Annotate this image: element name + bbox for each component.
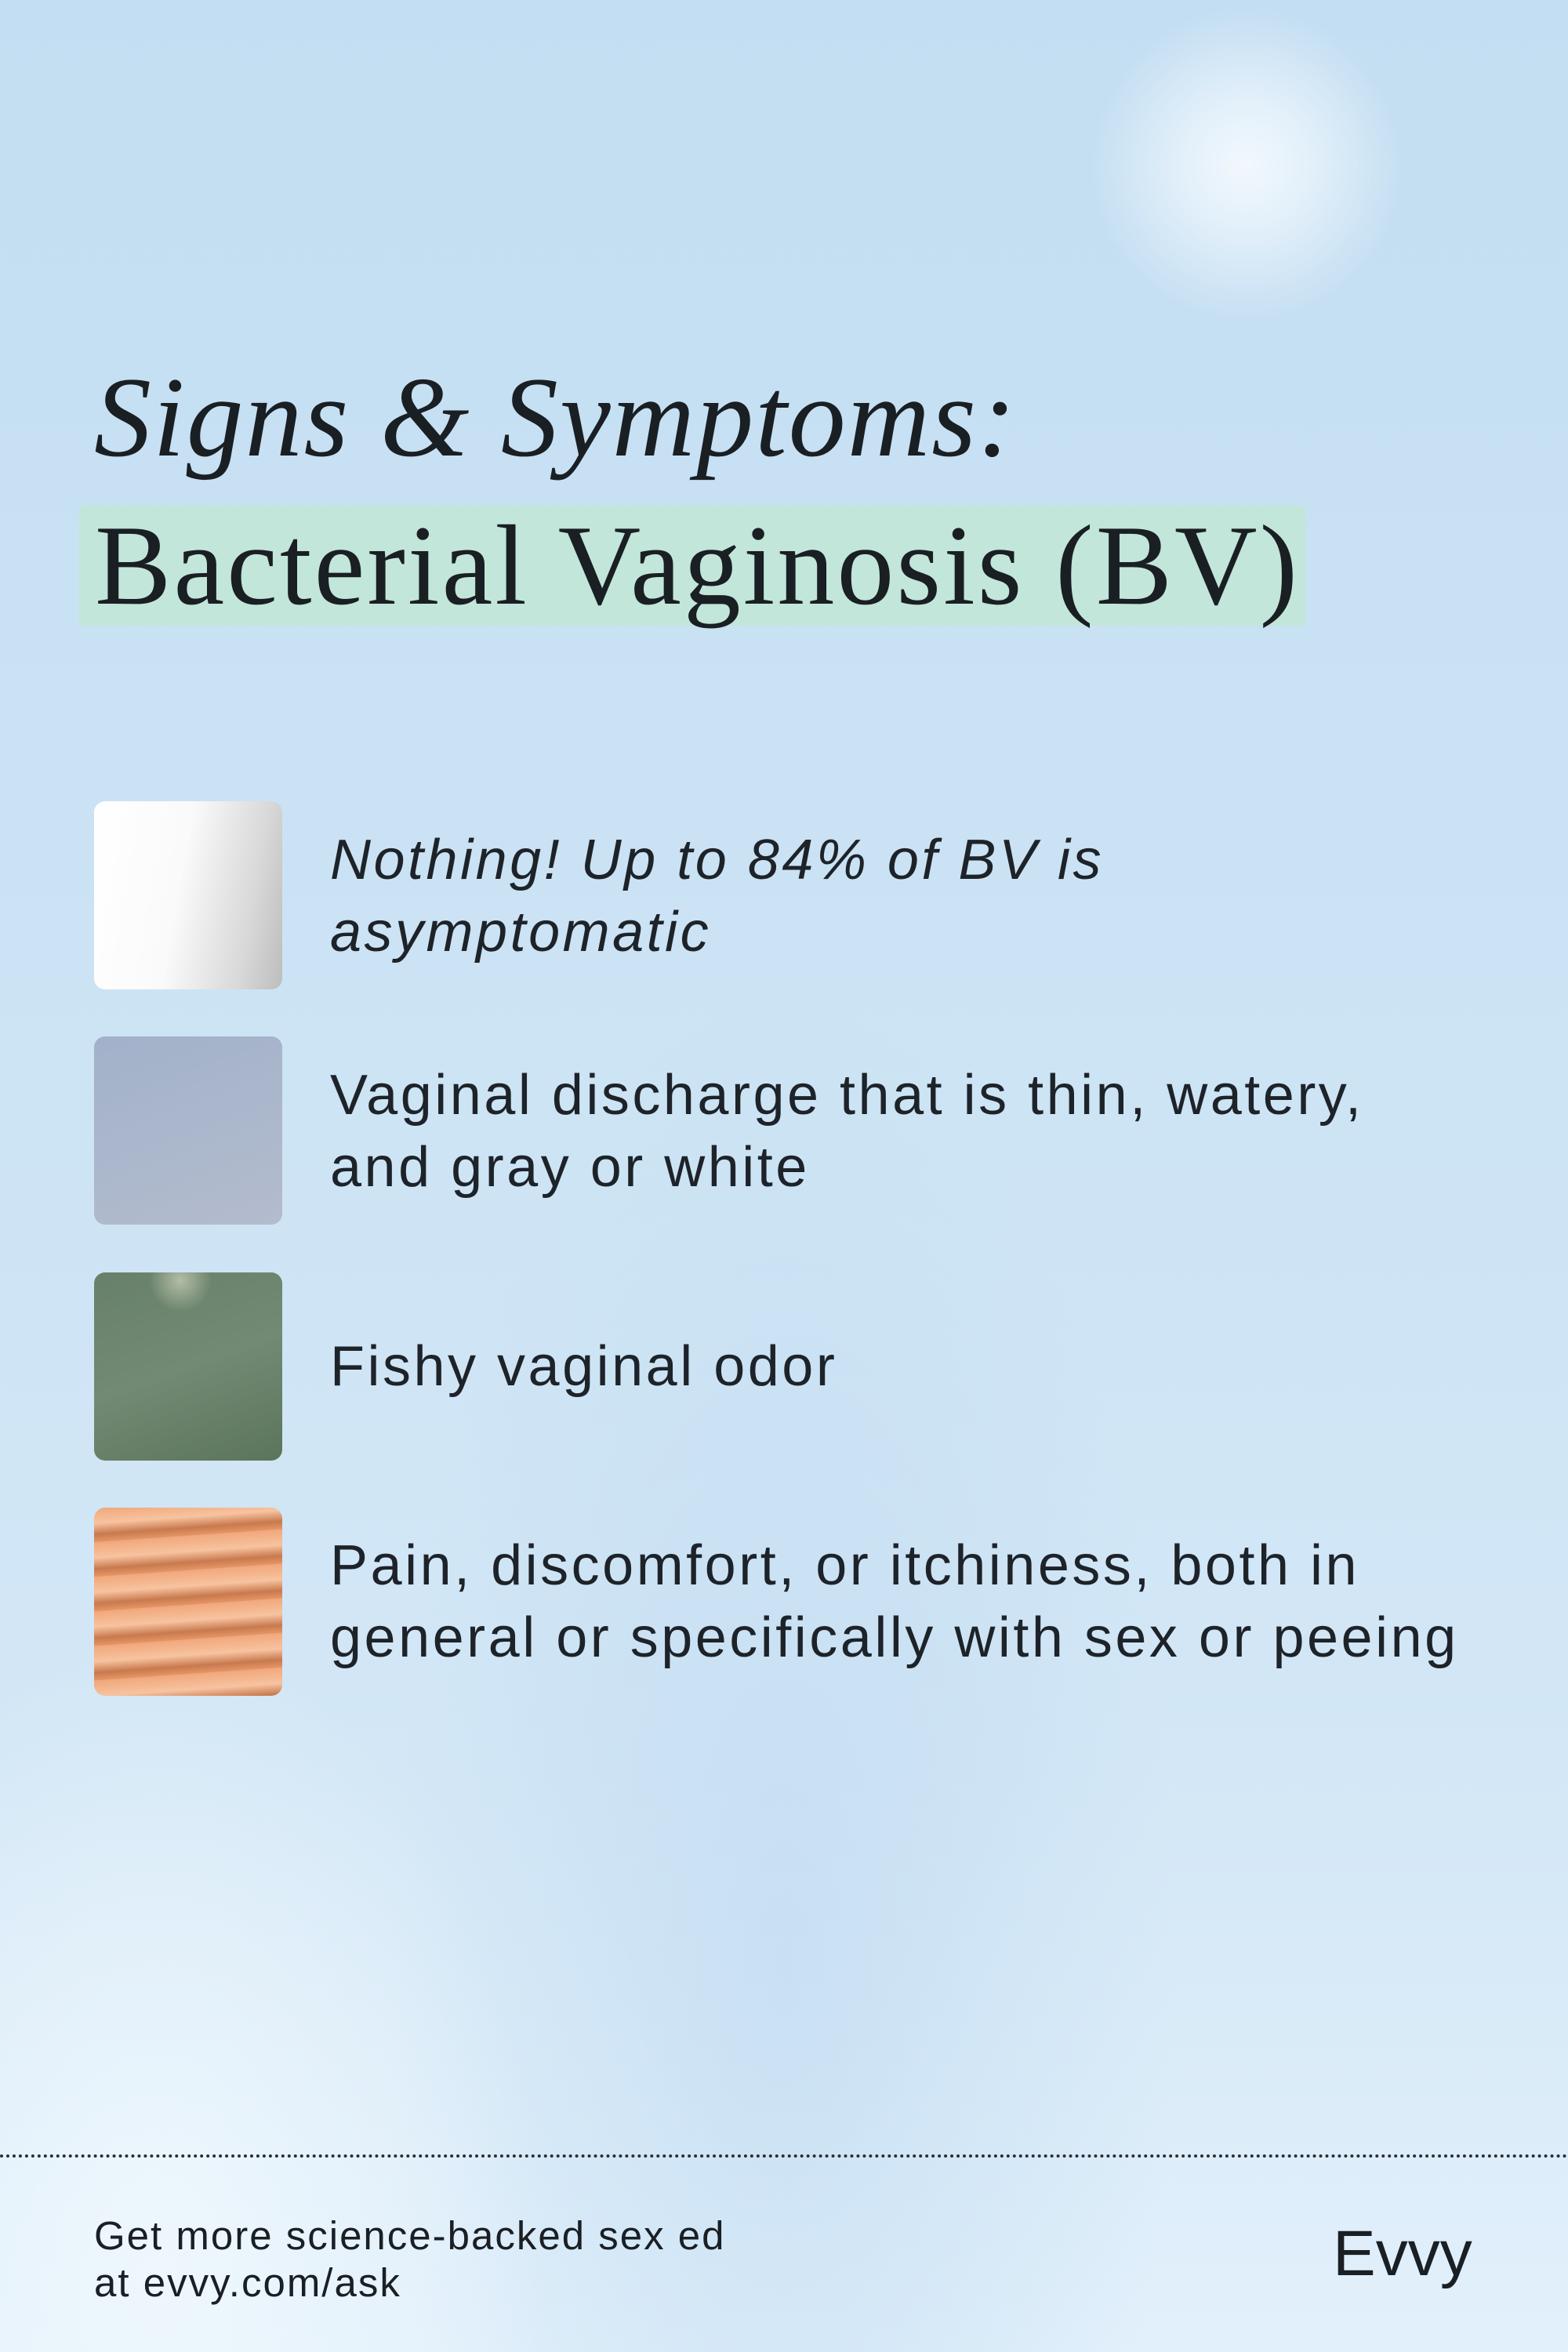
text: pain: Pain, discomfort, or itchiness, both in xyxy=(330,1534,1359,1597)
text: discharge: Vaginal discharge that is thin, watery, xyxy=(330,1064,1363,1127)
title line 1: Signs & Symptoms: xyxy=(94,354,1018,481)
title line 2 highlighted: Bacterial Vaginosis (BV) xyxy=(95,502,1300,629)
text: asymptomatic: Nothing! Up to 84% of BV is xyxy=(330,829,1104,891)
footer text xyxy=(94,2213,726,2305)
text: asymptomatic: asymptomatic xyxy=(330,901,711,964)
footer text: Get more science-backed sex ed xyxy=(94,2213,726,2258)
divider xyxy=(0,2154,1568,2158)
text: odor: Fishy vaginal odor xyxy=(330,1335,837,1398)
icon: green xyxy=(94,1272,282,1461)
text: discharge: and gray or white xyxy=(330,1136,810,1199)
text: pain xyxy=(330,1534,1459,1669)
logo: Evvy xyxy=(1333,2218,1472,2289)
text: asymptomatic xyxy=(330,829,1104,964)
icon: gray xyxy=(94,1036,282,1225)
icon: white blur xyxy=(94,801,282,989)
text: pain: general or specifically with sex or peeing xyxy=(330,1606,1459,1669)
footer text: at evvy.com/ask xyxy=(94,2260,401,2305)
text: discharge xyxy=(330,1064,1363,1199)
icon: orange stripes xyxy=(94,1508,282,1696)
